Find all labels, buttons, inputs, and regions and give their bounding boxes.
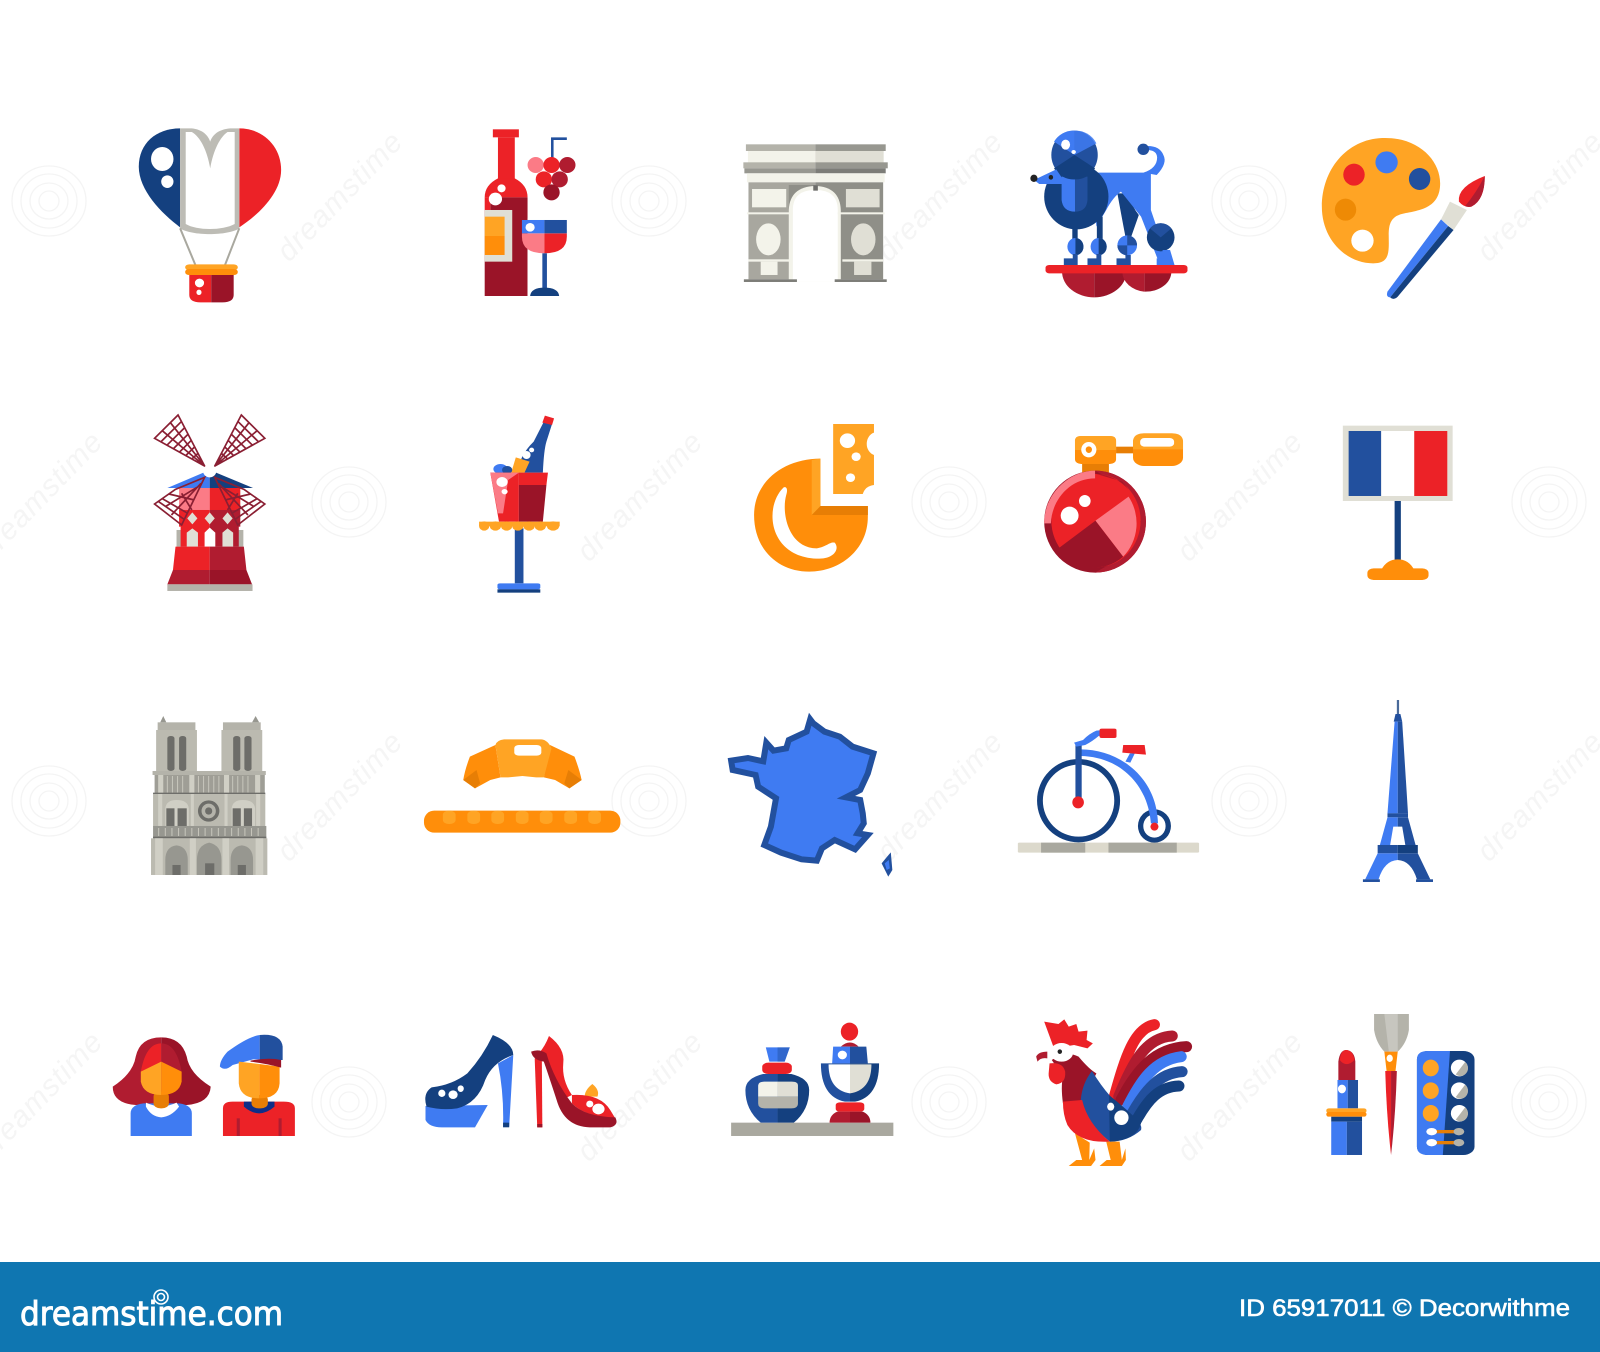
footer bar bbox=[0, 1262, 1600, 1352]
icon: map of France bbox=[731, 719, 892, 877]
icon: red perfume atomizer bbox=[1044, 433, 1183, 573]
icon: high-heeled shoes bbox=[425, 1035, 617, 1127]
icon: wine bottle, grapes and glass bbox=[485, 129, 576, 296]
eyeshadow palette bbox=[1417, 1051, 1475, 1155]
shoe: red stiletto bbox=[531, 1036, 617, 1127]
icon: lipstick, brush and eyeshadow palette bbox=[1326, 1014, 1475, 1155]
icon: Eiffel Tower bbox=[1363, 700, 1433, 882]
icon: Gallic rooster bbox=[1036, 1019, 1187, 1166]
icon: French couple portraits bbox=[113, 1035, 295, 1136]
lower sails bbox=[155, 477, 265, 525]
bottle: urn shaped bbox=[821, 1023, 879, 1123]
tail feathers bbox=[1114, 1025, 1187, 1120]
upper sails bbox=[155, 415, 265, 466]
icon: heart hot air balloon bbox=[139, 128, 281, 302]
lipstick bbox=[1326, 1050, 1366, 1155]
figure: woman bbox=[113, 1037, 211, 1136]
bottle: round blue bbox=[745, 1047, 809, 1123]
icon: perfume bottles on a shelf bbox=[731, 1023, 893, 1136]
shoe: blue platform bbox=[425, 1035, 513, 1127]
icon: champagne in ice bucket on table bbox=[479, 416, 560, 593]
makeup brush bbox=[1374, 1014, 1409, 1155]
image id and author: ID 65917011 © Decorwithme bbox=[1239, 1295, 1570, 1322]
icon: cheese wheel and slice bbox=[754, 424, 874, 572]
icon: French table flag bbox=[1343, 426, 1453, 580]
icon: Arc de Triomphe bbox=[743, 144, 888, 282]
dreamstime logo: dreamstime.com bbox=[20, 1294, 283, 1333]
figure: man with beret bbox=[220, 1035, 295, 1136]
icon: penny-farthing bicycle bbox=[1018, 729, 1199, 853]
icon: artist palette and brush bbox=[1322, 138, 1485, 299]
icon: Notre Dame cathedral bbox=[151, 716, 267, 875]
icon: Moulin Rouge windmill bbox=[155, 415, 265, 591]
icon: croissant and baguette bbox=[424, 739, 620, 833]
icon: poodle on a podium bbox=[1030, 131, 1187, 297]
